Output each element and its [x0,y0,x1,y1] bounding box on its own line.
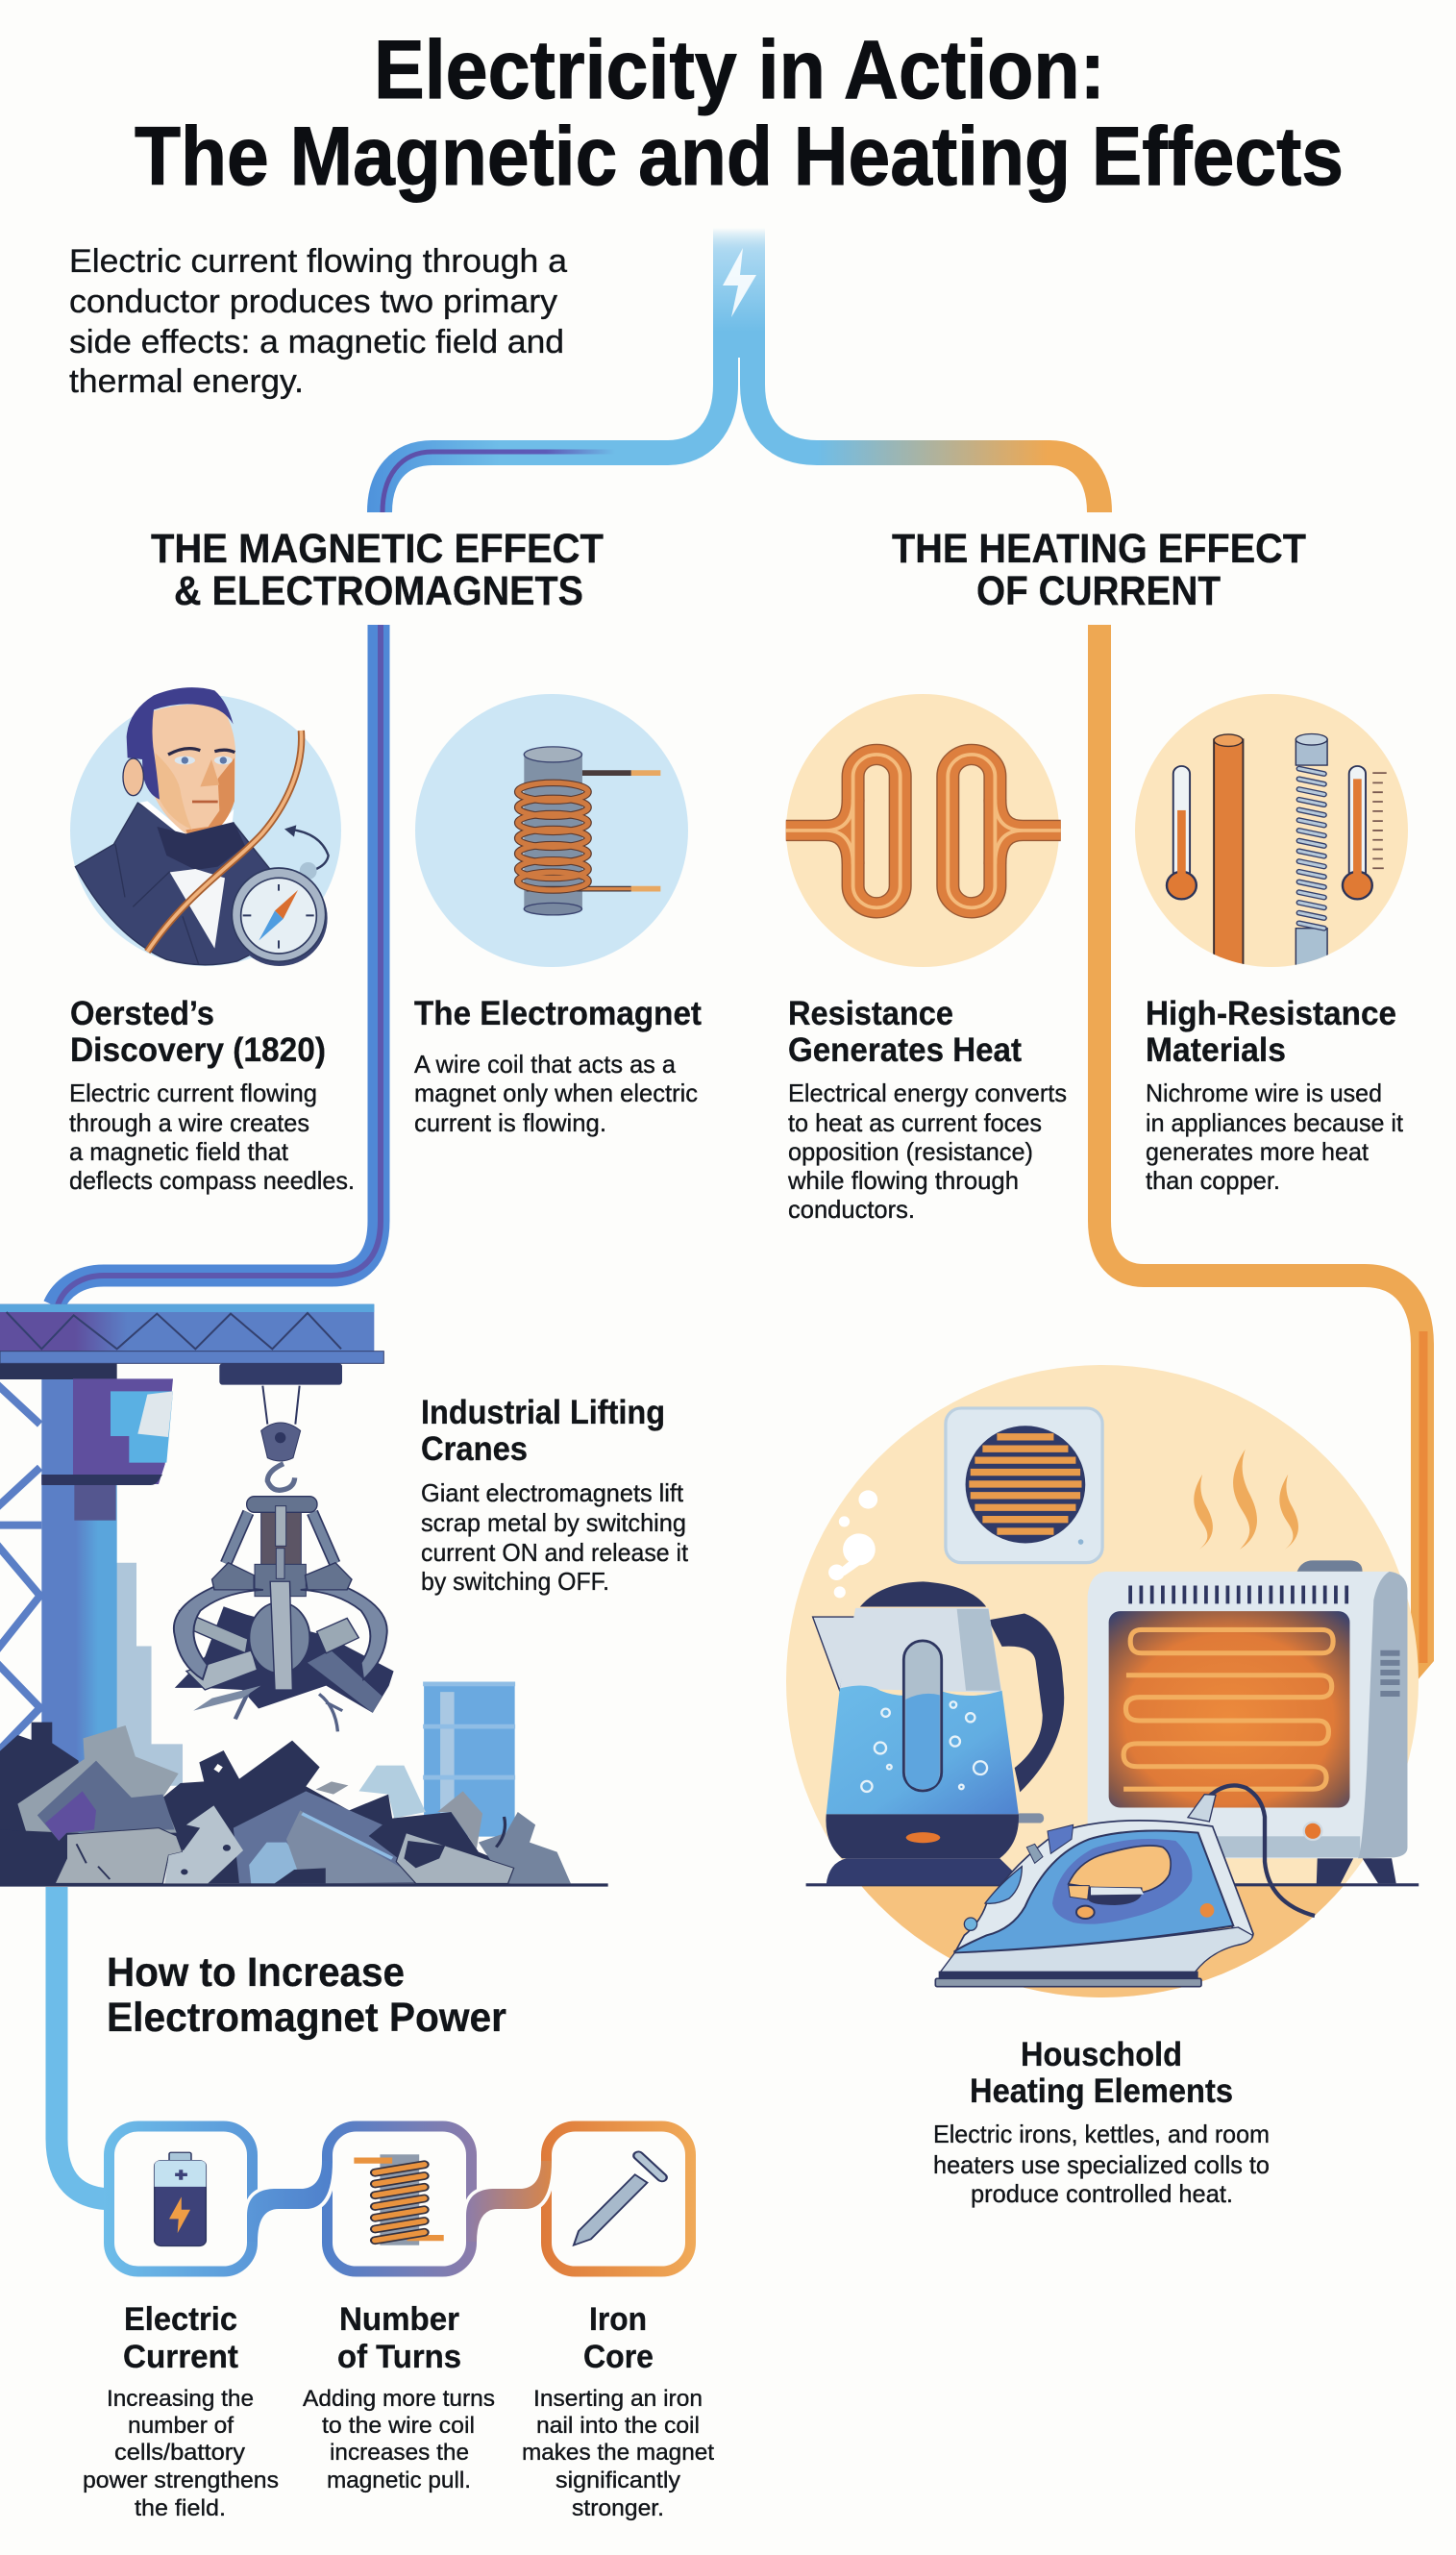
illustration: household appliances [57,1365,1442,2521]
text: materials description: Nichrome wire is used [1146,1079,1382,1107]
panel: resistance generates heat [786,694,1067,1224]
icon: steam bubbles [828,1490,877,1598]
text: number of turns description [303,2386,495,2493]
icon: iron nail box [546,2126,690,2271]
text: iron core description: makes the magnet [522,2440,714,2466]
text: crane description: Giant electromagnets lift [421,1478,684,1507]
text: electric current description: cells/battory [114,2440,245,2466]
text: number of turns description: magnetic pull. [327,2468,471,2493]
icon: coil box [327,2126,471,2271]
text: iron core description: significantly [555,2468,680,2493]
heading: Oersted: Discovery (1820) [70,1031,326,1069]
text: number of turns description: increases the [330,2440,469,2466]
heading: industrial lifting cranes [421,1394,665,1468]
text: resistance description: Electrical energy converts [788,1079,1067,1107]
icon: copper rod, nichrome coil and thermometers [1135,694,1408,971]
text: Oersted description: Electric current flowing [69,1079,317,1107]
text: electric current description: the field. [135,2495,226,2521]
floor line [806,1881,1419,1888]
intro text: thermal energy. [69,363,304,400]
heading: industrial lifting cranes: Industrial Lifting [421,1394,665,1431]
heading: Iron Core: Iron [589,2301,647,2338]
heading: high-resistance [1146,995,1396,1069]
title [135,24,1344,203]
icon: clothes iron [935,1785,1315,1987]
heading: Oersted: Oersted’s [70,995,214,1032]
text: Oersted description: through a wire creates [69,1108,309,1137]
text: household description: heaters use specialized colls to [933,2150,1270,2179]
heading: Number of Turns: of Turns [337,2339,461,2375]
heading: Oersted [70,995,326,1069]
heading: resistance: Generates Heat [788,1031,1022,1069]
text: electromagnet description: current is flowing. [414,1108,606,1137]
heading: resistance: Resistance [788,995,953,1032]
text: iron core description: Inserting an iron [533,2386,703,2412]
text: Oersted description: deflects compass needles. [69,1166,355,1195]
connector: battery box to coil box [247,2161,333,2242]
text: iron core description [522,2386,714,2521]
icon: electric kettle [813,1581,1064,1885]
scrap metal pile [0,1723,608,1885]
text: number of turns description: Adding more turns [303,2386,495,2412]
heading: how to increase power: Electromagnet Power [107,1995,506,2041]
text: electric current description: Increasing the [107,2386,254,2412]
text: electric current description [83,2386,279,2521]
text: crane description: scrap metal by switching [421,1508,686,1537]
text: resistance description: to heat as current foces [788,1108,1042,1137]
intro text [69,243,567,400]
heading: The Electromagnet: The Electromagnet [414,995,702,1032]
scrap in jaws [174,1563,394,1731]
icon: resistance wire loops [786,694,1061,967]
title: Electricity in Action: [374,24,1105,116]
heading: Electric Current [123,2301,238,2375]
text: crane description: by switching OFF. [421,1567,609,1596]
heading: magnetic effect: THE MAGNETIC EFFECT [151,526,604,572]
heading: Iron Core [583,2301,654,2375]
heading: Number of Turns: Number [339,2301,459,2338]
heading: resistance [788,995,1022,1069]
text: iron core description: stronger. [572,2495,664,2521]
wire: magnetic branch to crane [54,625,381,1305]
wire: heating branch to appliances [1099,625,1434,1688]
heading: household heating elements: Heating Elements [970,2072,1233,2110]
text: materials description: than copper. [1146,1166,1280,1195]
heading: household heating elements: Houschold [1021,2036,1182,2073]
text: materials description: in appliances because it [1146,1108,1404,1137]
crane tower and boom [0,1304,383,1879]
text: electric current description: number of [128,2413,234,2439]
heading: heating effect: THE HEATING EFFECT [892,526,1306,572]
icon: coil on iron core [415,694,688,967]
heading: magnetic effect [151,526,604,614]
grabber claw holding scrap [226,1386,334,1597]
text: Oersted description: a magnetic field that [69,1137,289,1166]
panel: number of turns [303,2126,495,2493]
panel: Oersted's discovery [69,687,355,1195]
text: number of turns description: to the wire coil [322,2413,475,2439]
intro text: side effects: a magnetic field and [69,324,564,360]
heading: Electric Current: Electric [124,2301,237,2338]
text: materials description: generates more heat [1146,1137,1370,1166]
background buildings [116,1563,183,1786]
heading: Number of Turns [337,2301,461,2375]
text: electromagnet description [414,1050,698,1137]
text: electromagnet description: A wire coil that acts as a [414,1050,677,1079]
icon: Oersted portrait with compass [70,687,341,966]
heading: industrial lifting cranes: Cranes [421,1430,528,1468]
text: crane description: current ON and release it [421,1538,689,1567]
heading: high-resistance: Materials [1146,1031,1286,1069]
heading: Iron Core: Core [583,2339,654,2375]
panel: electric current [83,2126,279,2521]
heading: how to increase power [107,1949,506,2041]
intro text: conductor produces two primary [69,284,557,320]
text: Oersted description [69,1079,355,1195]
heading: Electric Current: Current [123,2339,238,2375]
icon: wall vent heater [946,1408,1102,1563]
text: resistance description [787,1079,1067,1224]
wire: into electromagnet power section [57,1887,113,2199]
icon: room heater [1088,1560,1407,1885]
connector: coil box to nail box [466,2161,552,2242]
text: resistance description: conductors. [788,1195,915,1224]
panel: iron core [522,2126,714,2521]
panel: industrial crane illustration [0,1304,608,1885]
heading: household heating elements [970,2036,1233,2110]
text: electromagnet description: magnet only when electric [414,1079,698,1107]
text: resistance description: opposition (resistance) [788,1137,1033,1166]
icon: battery box [110,2126,252,2271]
panel: the electromagnet [414,694,702,1137]
text: resistance description: while flowing through [787,1166,1019,1195]
barrel [423,1682,515,1837]
text: materials description [1146,1079,1404,1195]
icon: heat waves [1194,1450,1298,1550]
intro text: Electric current flowing through a [69,243,567,280]
title: The Magnetic and Heating Effects [135,111,1344,203]
text: household description [933,2120,1270,2208]
wire: main feed with lightning bolt [380,228,1099,512]
text: crane description [421,1478,689,1596]
text: household description: Electric irons, kettles, and room [933,2120,1270,2148]
panel: high-resistance materials [1135,694,1408,1195]
heading: heating effect [892,526,1306,614]
heading: heating effect: OF CURRENT [976,568,1221,614]
heading: how to increase power: How to Increase [107,1949,405,1996]
text: electric current description: power strengthens [83,2468,279,2493]
heading: magnetic effect: & ELECTROMAGNETS [174,568,583,614]
heading: high-resistance: High-Resistance [1146,995,1396,1032]
background circle [769,1365,1442,2010]
text: household description: produce controlled heat. [971,2179,1233,2208]
text: iron core description: nail into the coil [536,2413,700,2439]
